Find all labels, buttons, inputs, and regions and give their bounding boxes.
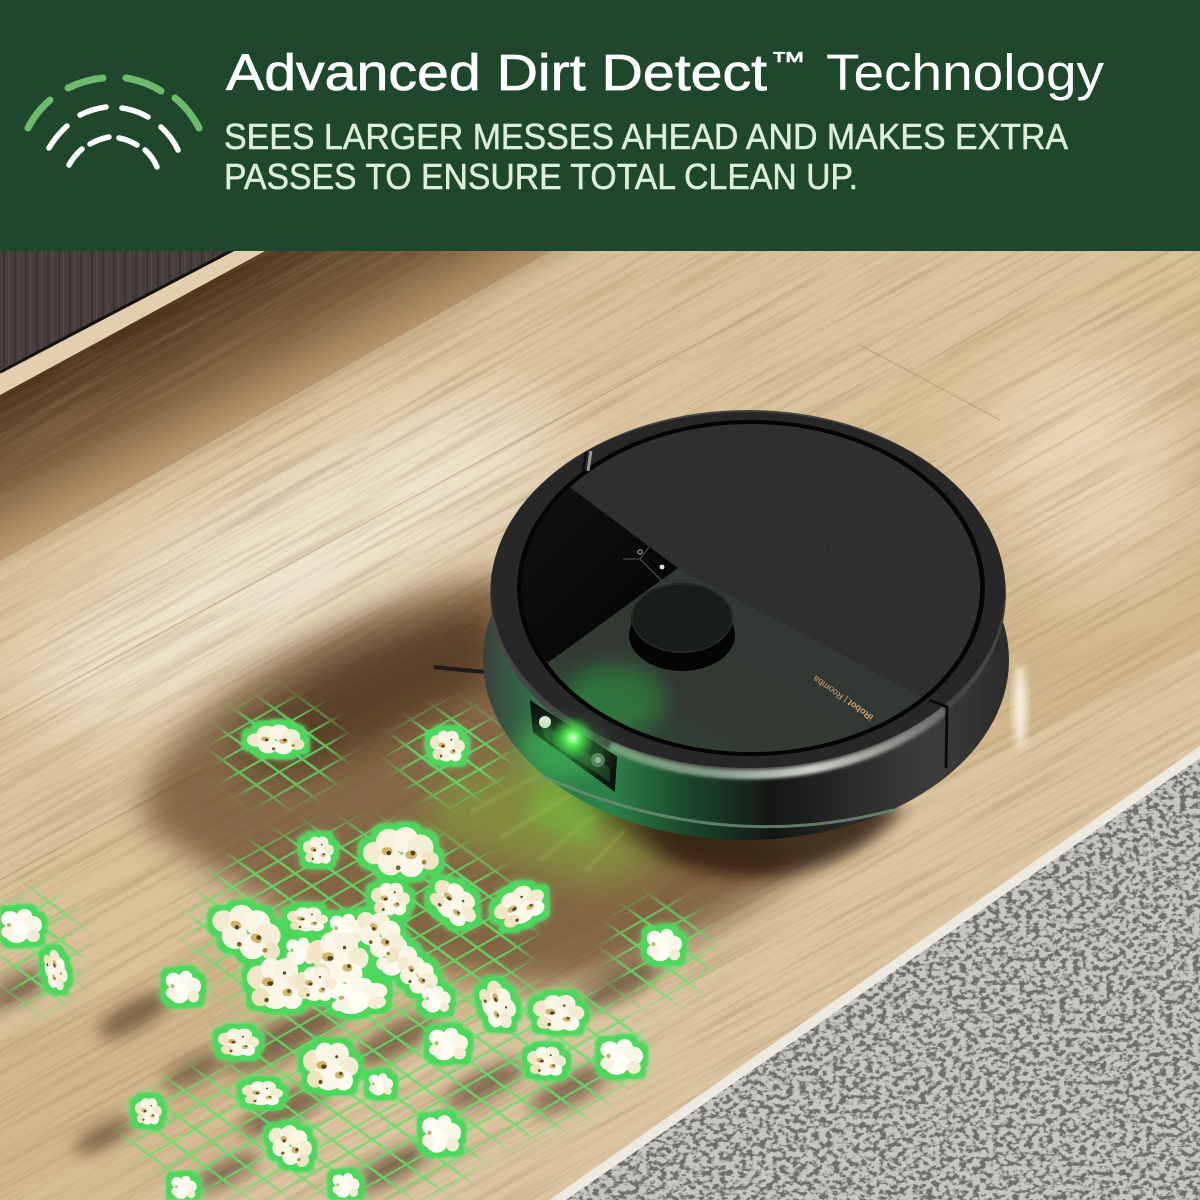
subtitle: PASSES TO ENSURE TOTAL CLEAN UP. [224,156,858,197]
robot rim [490,410,1006,778]
icon: dirt detect sensor waves [28,78,199,167]
popcorn pieces with green outline [1,725,682,1199]
detection grid overlay [0,688,723,1200]
popcorn shadows [0,951,667,1200]
panel: furniture corner [0,250,267,395]
panel: green header banner [0,0,1200,251]
control buttons [623,547,664,581]
side brush [434,667,486,672]
panel: wood floor background [0,250,1200,1200]
subtitle: SEES LARGER MESSES AHEAD AND MAKES EXTRA [224,116,1068,157]
robot vacuum [434,400,1009,840]
title: Technology [826,44,1105,101]
panel: robot shadow on floor [142,575,1026,985]
front sensor panel [514,702,616,790]
panel: carpet [540,740,1200,1200]
bumper seams [929,700,947,768]
title: Advanced Dirt Detect [226,44,767,101]
title: ™ [770,46,806,76]
robot top surface [522,424,980,752]
brand text: iRobot | Roomba [811,674,875,723]
robot body [483,480,1009,840]
subtitle [224,116,1068,197]
lidar turret [629,583,735,671]
green scan beam [426,750,660,890]
